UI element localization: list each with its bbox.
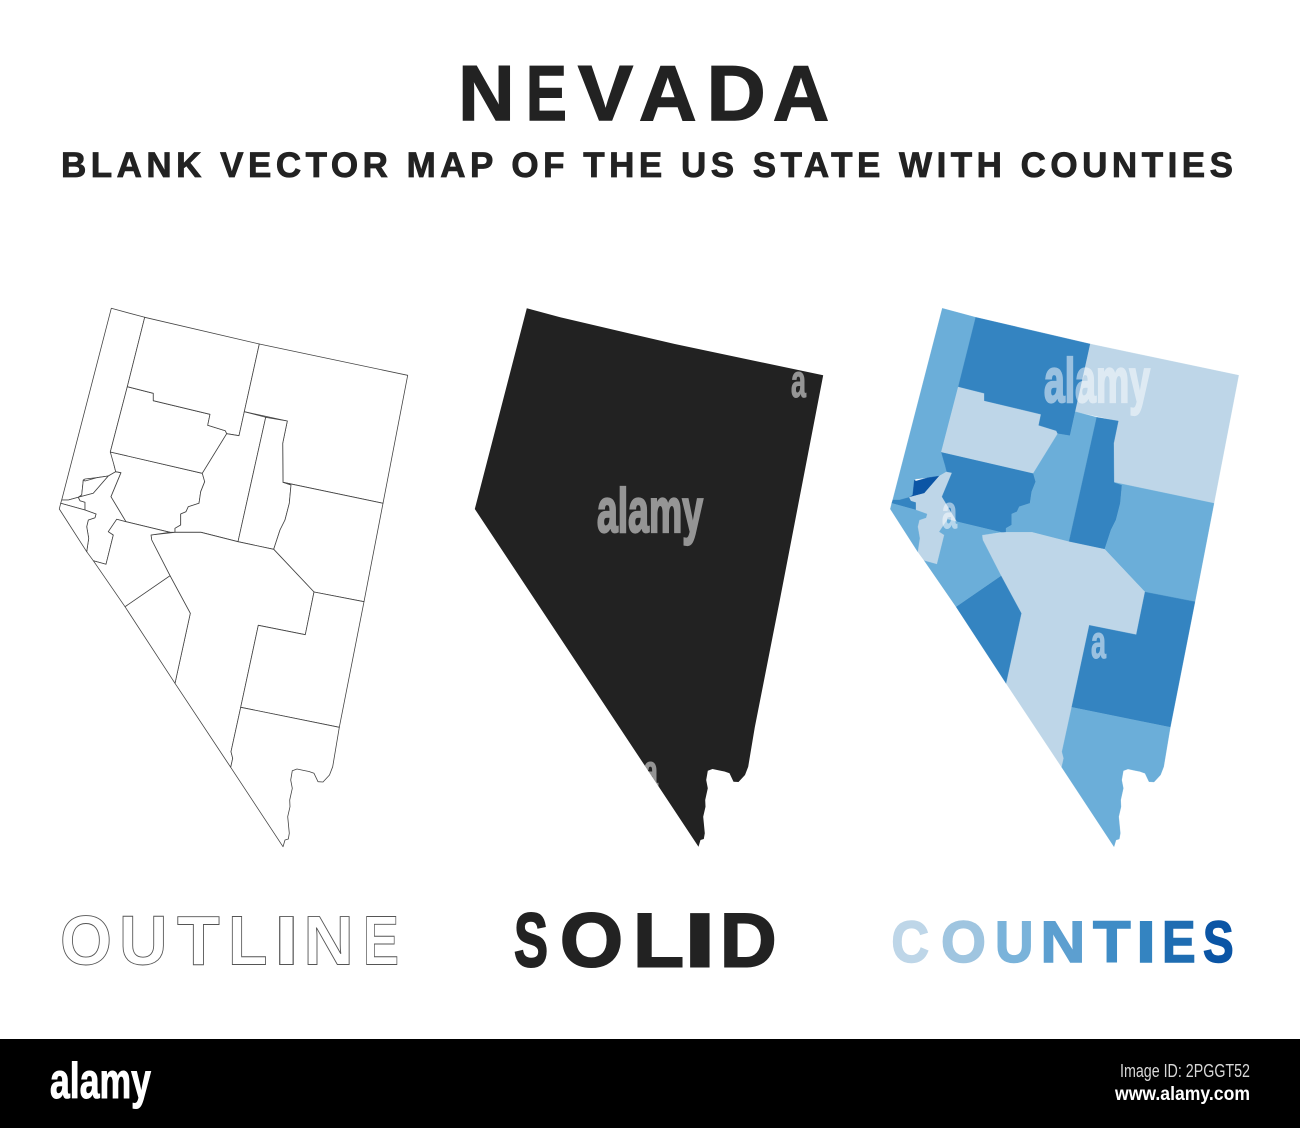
title: D (707, 49, 766, 137)
label: solid: L (633, 898, 684, 984)
footer logo: alamy (50, 1053, 151, 1109)
footer bar (0, 1039, 1300, 1128)
label: outline: I (274, 902, 299, 980)
label: counties: T (1093, 910, 1131, 975)
watermark on solid map (597, 355, 806, 797)
watermark on counties map (942, 347, 1150, 668)
county: Washoe (893, 308, 976, 500)
label: outline: E (363, 902, 399, 980)
label: outline: L (228, 902, 268, 980)
watermark on counties map: a (1091, 616, 1106, 668)
county: Eureka (1069, 417, 1122, 549)
county: Elko (1075, 344, 1239, 503)
label: solid: D (720, 898, 776, 984)
watermark on solid map: a (791, 355, 806, 407)
county: Nye (982, 532, 1145, 767)
label: outline: T (177, 902, 220, 980)
label: counties: C (891, 910, 929, 975)
website: www.alamy.com (1114, 1084, 1250, 1105)
label: counties: S (1203, 910, 1234, 975)
label: outline: O (60, 902, 112, 980)
label: solid: O (560, 898, 623, 984)
label: outline: N (303, 902, 354, 980)
title (458, 49, 829, 137)
county: Carson City (892, 497, 916, 510)
county: Clark (1062, 707, 1170, 847)
county: Esmeralda (956, 576, 1021, 683)
label: counties: N (1040, 910, 1085, 975)
county: Lincoln (1072, 592, 1195, 727)
title: V (578, 49, 633, 137)
label: counties: E (1162, 910, 1196, 975)
county: White Pine (1105, 482, 1214, 602)
watermark on counties map: a (942, 486, 957, 538)
map: counties (890, 308, 1239, 847)
watermark on solid map: alamy (597, 477, 703, 546)
label: solid (514, 898, 776, 984)
label: outline: U (119, 902, 168, 980)
county: Lander (1006, 412, 1097, 542)
title: A (639, 49, 696, 137)
county: Douglas (890, 503, 927, 552)
label: solid: S (514, 898, 548, 984)
title: A (773, 49, 829, 137)
county: Mineral (924, 519, 1001, 607)
title: N (458, 49, 515, 137)
title: E (526, 49, 567, 137)
map: solid (475, 308, 823, 847)
watermark on solid map: a (643, 745, 658, 797)
label: counties: U (995, 910, 1034, 975)
label: counties (891, 910, 1234, 975)
county: Lyon (909, 472, 957, 564)
subtitle: BLANK VECTOR MAP OF THE US STATE WITH COUNTIES (61, 146, 1233, 185)
county: Humboldt (958, 317, 1090, 436)
county: Storey (909, 476, 939, 497)
map: outline (59, 308, 408, 847)
label: counties: I (1136, 910, 1156, 975)
label: outline (60, 902, 399, 980)
county: Pershing (941, 387, 1058, 473)
watermark on counties map: alamy (1044, 347, 1150, 416)
county: Churchill (941, 452, 1036, 532)
label: counties: O (941, 910, 986, 975)
label: solid: I (684, 898, 716, 984)
image id: Image ID: 2PGGT52 (1120, 1061, 1250, 1081)
